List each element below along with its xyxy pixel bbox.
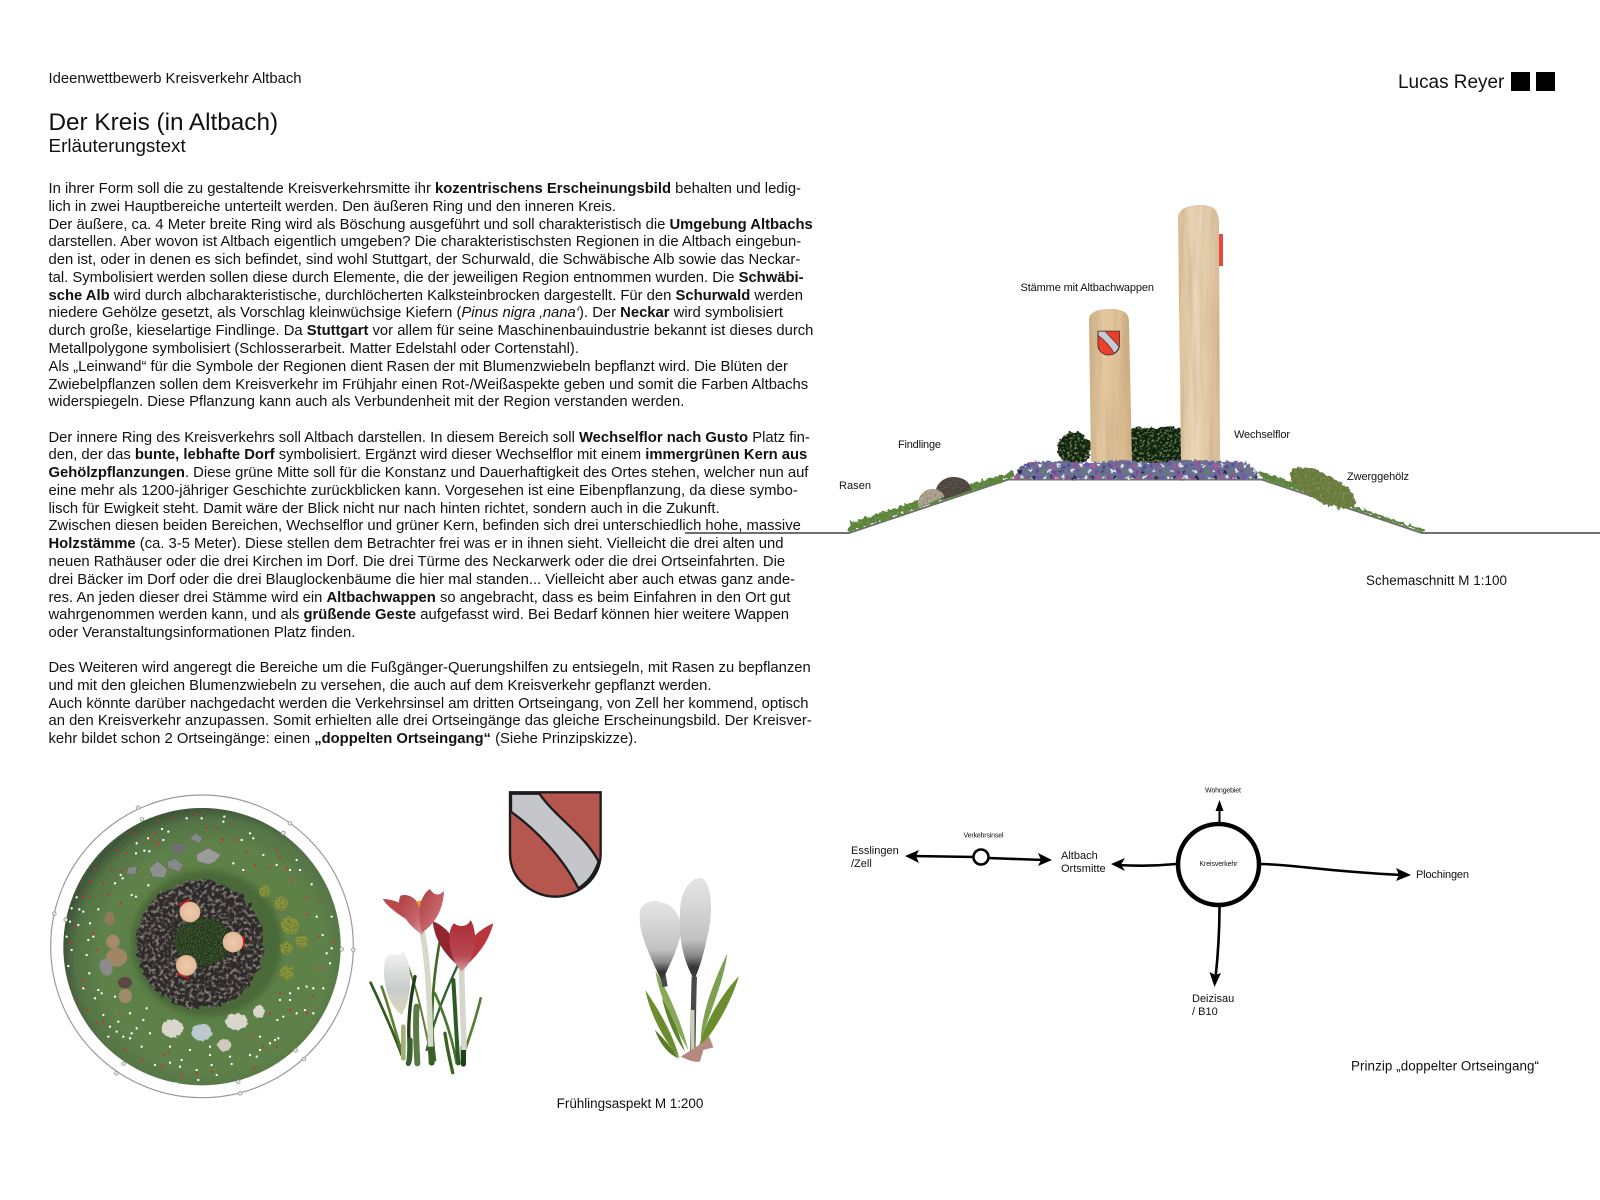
text block: inner ring: res. An jeden dieser drei Stämme wird ein Altbachwappen so angebracht, dass es beim Einfahren in den Ort gut: [48, 590, 790, 606]
grey bud right: [680, 878, 711, 980]
arrow: to Esslingen: [912, 856, 975, 857]
label: /Zell: [851, 858, 872, 870]
principle diagram: [851, 788, 1539, 1074]
label: Zwerggehölz: [1347, 471, 1409, 483]
label: Rasen: [839, 480, 871, 492]
red and white crocus group: [371, 889, 493, 1073]
text block: outer ring: lich in zwei Hauptbereiche unterteilt werden. Den äußeren Ring und den inneren Kreis.: [48, 199, 616, 215]
text block: outer ring: durch große, kieselartige Findlinge. Da Stuttgart vor allem für seine Maschinenbauindustrie bekannt ist dieses durch: [48, 323, 813, 339]
label: Plochingen: [1416, 869, 1469, 881]
text block: inner ring: Zwischen diesen beiden Bereichen, Wechselflor und grüner Kern, befinden sich drei unterschiedlich hohe, massive: [48, 518, 801, 534]
arrowhead: [1038, 853, 1052, 866]
text block: inner ring: drei Bäcker im Dorf oder die drei Blauglockenbäume die hier mal standen... Vielleicht aber auch etwas ganz ande-: [48, 572, 795, 588]
text block: further suggestions: an den Kreisverkehr anzupassen. Somit erhielten alle drei Ortseingänge das gleiche Erscheinungsbild. Der Kreisver-: [48, 713, 812, 729]
coat of arms large and crocuses: [371, 792, 739, 1111]
lawn on slopes: [849, 471, 1425, 532]
text block: further suggestions: Des Weiteren wird angeregt die Bereiche um die Fußgänger-Querungshilfen zu entsiegeln, mit Rasen zu bepflanzen: [48, 660, 811, 676]
text block: inner ring: eine mehr als 1200-jähriger Geschichte zurückblicken kann. Vorgesehen ist eine Eibenpflanzung, da diese symbo-: [48, 483, 798, 499]
trunk: [1178, 205, 1220, 462]
text block: inner ring: oder Veranstaltungsinformationen Platz finden.: [48, 625, 355, 641]
label: Findlinge: [898, 439, 941, 451]
text block: further suggestions: [48, 660, 812, 747]
label: Wechselflor: [1234, 429, 1290, 441]
text block: inner ring: lisch für Ewigkeit steht. Damit wäre der Blick nicht nur nach hinten richtet, sondern auch in die Zukunft.: [48, 501, 720, 517]
text block: inner ring: Gehölzpflanzungen. Diese grüne Mitte soll für die Konstanz und Dauerhaftigkeit des Ortes stehen, welcher nun auf: [48, 465, 808, 481]
trunk tops: [176, 899, 244, 978]
red crocus dots: [70, 814, 333, 1075]
dark boulder: [935, 477, 971, 499]
label: Esslingen: [851, 845, 899, 857]
header: competition name: Ideenwettbewerb Kreisverkehr Altbach: [48, 70, 302, 86]
ring: [1178, 824, 1259, 905]
leaves: [371, 937, 481, 1073]
seasonal flower bed (Wechselflor): [1014, 460, 1260, 479]
red signs: [177, 899, 244, 978]
island circle: [974, 850, 988, 864]
white crocus dots: [67, 817, 332, 1083]
tall trunk with red sign: [1178, 205, 1223, 462]
label: Altbach: [1061, 850, 1098, 862]
text block: outer ring: In ihrer Form soll die zu gestaltende Kreisverkehrsmitte ihr kozentrischens Erscheinungsbild behalten und ledig-: [48, 181, 801, 197]
outer thin ring: [51, 795, 353, 1098]
arrow: Deizisau: [1210, 907, 1221, 987]
text block: outer ring: Metallpolygone symbolisiert (Schlosserarbeit. Matter Edelstahl oder Cortenstahl).: [48, 341, 579, 357]
text block: outer ring: sche Alb wird durch albcharakteristische, durchlöcherten Kalksteinbrocken dargestellt. Für den Schurwald werden: [48, 288, 803, 304]
caption: Prinzip „doppelter Ortseingang“: [1351, 1058, 1539, 1074]
limestone chunks: [161, 1005, 265, 1051]
red sign: [1219, 234, 1223, 266]
text block: outer ring: den ist, oder in denen es sich befindet, sind wohl Stuttgart, der Schurwald, die Schwäbische Alb sowie das Neckar-: [48, 252, 800, 268]
author name and squares: [1398, 72, 1555, 93]
gravel mound: [137, 880, 263, 1008]
ground line and embankment profile: [685, 480, 1600, 533]
text block: outer ring: niedere Gehölze gesetzt, als Vorschlag kleinwüchsige Kiefern (Pinus nigra ‚nana‘). Der Neckar wird symbolisiert: [48, 305, 783, 321]
text block: inner ring: [48, 430, 810, 641]
title: Der Kreis (in Altbach): [48, 109, 278, 136]
text block: outer ring: [48, 181, 813, 410]
bulb: [681, 1037, 713, 1062]
subtitle: Erläuterungstext: [48, 135, 186, 156]
text block: outer ring: Als „Leinwand“ für die Symbole der Regionen dient Rasen der mit Blumenzwiebeln bepflanzt wird. Die Blüten der: [48, 359, 788, 375]
stems: [422, 932, 431, 1047]
text block: inner ring: wahrgenommen werden kann, und als grüßende Geste aufgefasst wird. Bei Bedarf können hier weitere Wappen: [48, 607, 789, 623]
evergreen core: [174, 918, 231, 966]
arrow: Wohngebiet: [1216, 800, 1224, 822]
label: Stämme mit Altbachwappen: [1020, 282, 1154, 294]
text block: outer ring: tal. Symbolisiert werden sollen diese durch Elemente, die der jeweiligen Region entnommen wurden. Die Schwäbi-: [48, 270, 804, 286]
red crocus flower: [383, 889, 444, 935]
dwarf shrubs (Zwerggehölz): [1285, 459, 1361, 517]
light boulder: [918, 489, 944, 507]
trunk top: [180, 902, 200, 922]
traffic island with arrows: [905, 850, 1052, 866]
coat of arms on trunk: [1098, 331, 1119, 355]
text block: inner ring: Holzstämme (ca. 3-5 Meter). Diese stellen dem Betrachter frei was er in ihnen sieht. Vielleicht die drei alten und: [48, 536, 784, 552]
text block: further suggestions: kehr bildet schon 2 Ortseingänge: einen „doppelten Ortseingang“ (Siehe Prinzipskizze).: [48, 731, 637, 747]
caption: Frühlingsaspekt M 1:200: [557, 1096, 703, 1111]
text block: inner ring: Der innere Ring des Kreisverkehrs soll Altbach darstellen. In diesem Bereich soll Wechselflor nach Gusto Platz fin-: [48, 430, 810, 446]
short trunk: [1089, 309, 1132, 462]
text block: outer ring: Der äußere, ca. 4 Meter breite Ring wird als Böschung ausgeführt und soll charakteristisch die Umgebung Altbachs: [48, 217, 813, 233]
text block: outer ring: darstellen. Aber wovon ist Altbach eigentlich umgeben? Die charakteristischsten Regionen in die Altbach eingebun-: [48, 234, 801, 250]
shadow around mound: [132, 870, 282, 1017]
handles on ring: [52, 806, 355, 1095]
caption: Schemaschnitt M 1:100: [1366, 573, 1507, 588]
arrow: Ortsmitte: [1111, 858, 1176, 871]
text block: further suggestions: und mit den gleichen Blumenzwiebeln zu versehen, die auch auf dem Kreisverkehr gepflanzt werden.: [48, 678, 711, 694]
author name: Lucas Reyer: [1398, 72, 1504, 93]
coat of arms: [510, 792, 601, 897]
trunk top: [223, 932, 243, 952]
roundabout circle: [1178, 824, 1259, 905]
plan view: [51, 795, 355, 1098]
grey bud left: [640, 901, 681, 982]
boulders (Findlinge): [918, 477, 971, 507]
text block: inner ring: neuen Rathäuser oder die drei Kirchen im Dorf. Die drei Türme des Neckarwerk oder die drei Ortseinfahrten. Die: [48, 554, 785, 570]
square marks: [1511, 72, 1555, 91]
grey crocus with green leaves: [640, 878, 739, 1062]
dwarf pines: [259, 885, 308, 980]
text block: outer ring: widerspiegeln. Diese Pflanzung kann auch als Verbundenheit mit der Region verstanden werden.: [48, 394, 684, 410]
arrowhead: [905, 850, 919, 863]
text block: inner ring: den, der das bunte, lebhafte Dorf symbolisiert. Ergänzt wird dieser Wechselflor mit einem immergrünen Kern aus: [48, 447, 807, 463]
stems: [662, 967, 694, 1053]
trunk top: [176, 955, 197, 976]
lawn disc: [63, 808, 341, 1085]
label: / B10: [1192, 1006, 1218, 1018]
label: Kreisverkehr: [1200, 861, 1238, 868]
label: Wohngebiet: [1205, 788, 1241, 794]
evergreen core bushes: [1057, 426, 1211, 464]
leaves: [645, 953, 739, 1058]
text block: outer ring: Zwiebelpflanzen sollen dem Kreisverkehr im Frühjahr einen Rot-/Weißaspekte geben und somit die Farben Altbachs: [48, 377, 808, 393]
label: Deizisau: [1192, 993, 1234, 1005]
label: Ortsmitte: [1061, 863, 1106, 875]
metal polygons: [127, 833, 221, 878]
arrow: Plochingen: [1261, 864, 1411, 881]
red crocus flower: [433, 920, 493, 972]
text block: further suggestions: Auch könnte darüber nachgedacht werden die Verkehrsinsel am dritten Ortseingang, von Zell her kommend, optisch: [48, 696, 809, 712]
river boulders: [97, 912, 132, 1003]
label: Verkehrsinsel: [964, 832, 1004, 840]
arrow: to Altbach: [988, 858, 1044, 860]
white crocus bud: [384, 952, 410, 1015]
section drawing: [685, 205, 1600, 588]
